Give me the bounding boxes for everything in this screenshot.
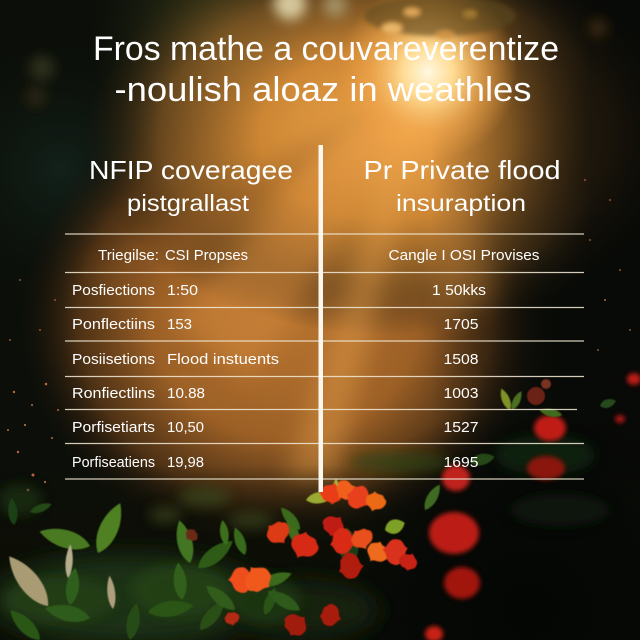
table rules <box>65 234 584 479</box>
right table column: 1705 <box>444 317 478 333</box>
column heading: Private flood insurance: Pr Private flood <box>364 155 560 185</box>
right table column: 1695 <box>444 455 478 471</box>
left table column: 1:50 <box>167 283 198 299</box>
foliage: blurred background plants <box>0 400 640 640</box>
blurred red blossoms right <box>425 373 640 640</box>
left table column: 10.88 <box>167 386 205 402</box>
central divider <box>318 145 323 492</box>
column heading: NFIP coverage: pistgrallast <box>127 190 250 216</box>
foliage: green leaves left <box>1 497 303 640</box>
left table column: 153 <box>167 317 192 333</box>
leaves and buds right <box>421 379 617 512</box>
column heading: Private flood insurance: insuraption <box>396 190 526 216</box>
right table column <box>388 248 540 471</box>
left table column: Ronfiectlins <box>72 386 155 402</box>
right table column: 1 50kks <box>432 283 486 299</box>
column heading: Private flood insurance <box>364 155 560 216</box>
light rays <box>90 80 500 480</box>
right table column: Cangle I OSI Provises <box>388 248 540 264</box>
title <box>93 30 559 109</box>
sparkling dust particles <box>7 179 631 491</box>
left table column: Posfiections <box>72 283 155 299</box>
left table column: Ponflectiins <box>72 317 155 333</box>
left table column: 10,50 <box>167 420 204 436</box>
flowers: red and orange cluster <box>183 477 421 640</box>
left table column: Porfiseatiens <box>72 455 155 471</box>
right table column: 1508 <box>444 352 478 368</box>
sun glow <box>338 0 518 162</box>
title: Fros mathe a couvareverentize <box>93 30 559 68</box>
title: -noulish aloaz in weathles <box>114 71 532 109</box>
left table column: Triegilse: <box>98 248 159 264</box>
left table column: Flood instuents <box>167 352 279 368</box>
left table column: Posiisetions <box>72 352 155 368</box>
left table column: 19,98 <box>167 455 204 471</box>
column heading: NFIP coverage: NFIP coveragee <box>89 155 293 185</box>
right table column: 1527 <box>444 420 478 436</box>
left table column: Porfisetiarts <box>72 420 155 436</box>
left table column <box>72 248 279 471</box>
column heading: NFIP coverage <box>89 155 293 216</box>
canopy highlights <box>364 0 516 39</box>
left table column: CSI Propses <box>165 248 248 264</box>
right table column: 1003 <box>444 386 478 402</box>
